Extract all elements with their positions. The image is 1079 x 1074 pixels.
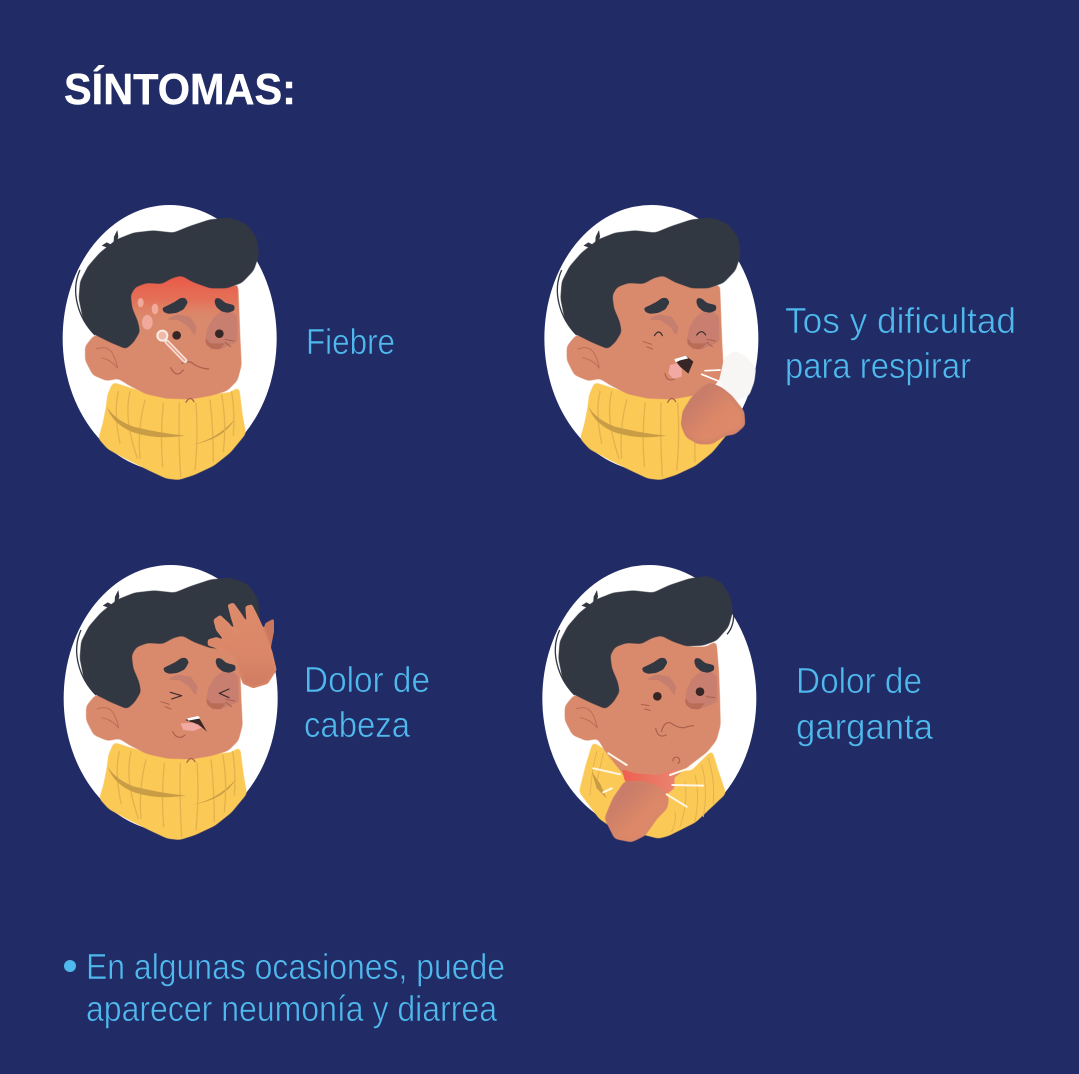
icon: hand on throat [605, 782, 668, 842]
label: tos y dificultad para respirar: Tos y dificultad [785, 300, 1016, 341]
label: dolor de cabeza [304, 659, 430, 745]
icon: open mouth [668, 356, 693, 379]
illustration: dolor de garganta [542, 565, 756, 842]
label: dolor de garganta [796, 660, 934, 747]
bullet note: En algunas ocasiones, puede [86, 946, 505, 987]
illustration: tos [544, 205, 758, 479]
title: SÍNTOMAS: [64, 64, 296, 114]
illustration: dolor de cabeza [64, 565, 278, 839]
label: dolor de cabeza: cabeza [304, 704, 411, 745]
bullet note [64, 946, 505, 1029]
label: dolor de garganta: Dolor de [796, 660, 922, 701]
label: dolor de garganta: garganta [796, 706, 934, 747]
icon: hand on forehead [208, 603, 276, 688]
label: tos y dificultad para respirar: para respirar [785, 345, 971, 386]
label: tos y dificultad para respirar [785, 300, 1016, 386]
label: fiebre: Fiebre [306, 321, 395, 362]
icon: pain marks [593, 753, 703, 807]
icon: cough puff [720, 352, 755, 400]
sweater open collar [580, 743, 725, 838]
icon: thermometer [157, 331, 185, 361]
icon: fist [682, 383, 744, 443]
illustration: fiebre [63, 205, 277, 479]
bullet note: aparecer neumonía y diarrea [86, 988, 498, 1029]
icon: grimacing mouth [181, 716, 207, 732]
sore throat [622, 768, 675, 796]
icon: sweat drops [138, 298, 158, 330]
label: dolor de cabeza: Dolor de [304, 659, 430, 700]
